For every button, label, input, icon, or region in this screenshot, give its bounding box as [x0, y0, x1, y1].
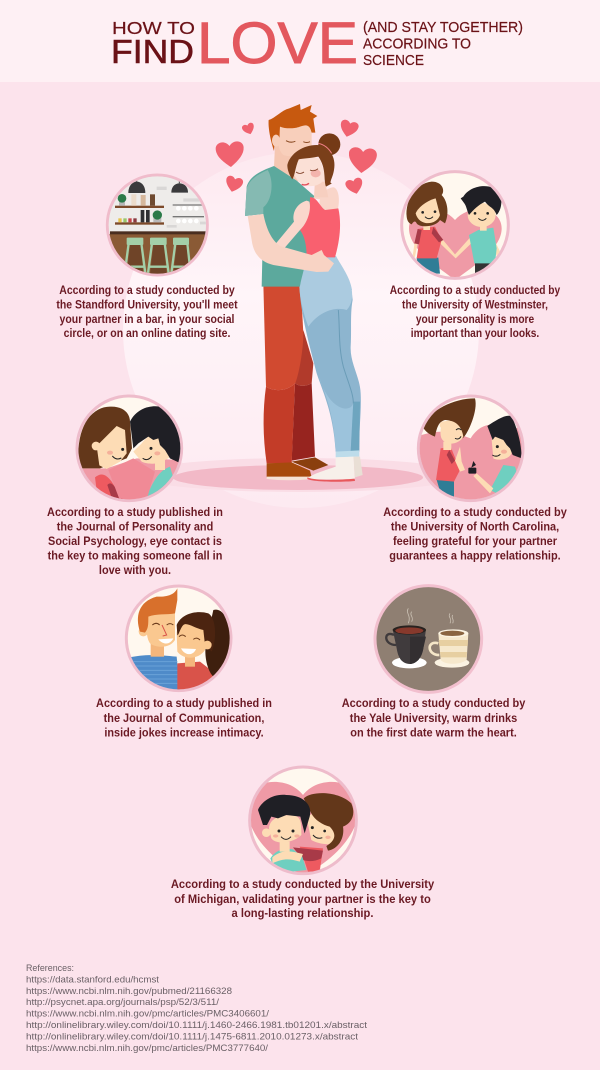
text: Yale study — [342, 698, 526, 740]
header band — [0, 0, 600, 82]
text: eye contact study: the key to making someone fall in — [48, 550, 222, 563]
text: inside jokes study — [96, 698, 272, 740]
text: North Carolina study: feeling grateful for your partner — [393, 536, 558, 548]
references: https://www.ncbi.nlm.nih.gov/pubmed/21166328 — [26, 986, 232, 997]
text: eye contact study: love with you. — [99, 565, 171, 577]
text: North Carolina study: the University of North Carolina, — [391, 521, 559, 534]
man torso and head — [245, 104, 317, 287]
text: Westminster study: According to a study conducted by — [390, 284, 561, 297]
references: http://onlinelibrary.wiley.com/doi/10.1111/j.1475-6811.2010.01273.x/abstract — [26, 1032, 358, 1042]
illustration: hugging couple upper body — [245, 104, 352, 290]
text: North Carolina study — [383, 507, 567, 563]
text: eye contact study: Social Psychology, eye contact is — [48, 536, 222, 548]
circle 5: laughing couple — [126, 586, 231, 693]
text: Stanford study: According to a study conducted by — [59, 284, 235, 297]
text: inside jokes study: According to a study published in — [96, 698, 272, 710]
text: Yale study: on the first date warm the heart. — [350, 727, 517, 740]
references: https://www.ncbi.nlm.nih.gov/pmc/articles/PMC3406601/ — [26, 1008, 269, 1020]
text: Stanford study — [56, 284, 238, 340]
references: http://onlinelibrary.wiley.com/doi/10.1111/j.1460-2466.1981.tb01201.x/abstract — [26, 1020, 367, 1031]
text: Michigan study: a long-lasting relationship. — [232, 908, 373, 920]
text: Stanford study: the Standford University, you'll meet — [56, 299, 238, 312]
title: (AND STAY TOGETHER) — [363, 19, 523, 36]
illustration: hugging couple legs — [263, 280, 363, 482]
text: Stanford study: your partner in a bar, in your social — [60, 313, 234, 326]
title: FIND — [111, 34, 194, 71]
references: https://www.ncbi.nlm.nih.gov/pmc/articles/PMC3777640/ — [26, 1043, 268, 1054]
text: Michigan study: According to a study conducted by the University — [171, 879, 435, 891]
icons: hearts around couple — [215, 119, 377, 196]
text: eye contact study: According to a study published in — [47, 507, 223, 519]
text: eye contact study — [47, 507, 223, 577]
circle 4: proposal — [417, 396, 523, 503]
text: inside jokes study: inside jokes increase intimacy. — [104, 727, 264, 740]
circle 3: eye contact — [77, 396, 183, 503]
circle 6: warm drinks — [375, 586, 482, 692]
title — [111, 11, 523, 76]
circle 7: embracing couple — [246, 767, 360, 875]
text: Yale study: According to a study conducted by — [342, 698, 526, 710]
text: eye contact study: the Journal of Personality and — [57, 521, 213, 534]
title: ACCORDING TO — [363, 36, 471, 52]
text: Westminster study: the University of Westminster, — [402, 299, 548, 312]
text: Stanford study: circle, or on an online dating site. — [64, 327, 230, 340]
text: North Carolina study: guarantees a happy relationship. — [389, 550, 561, 563]
title: SCIENCE — [363, 52, 424, 69]
background glow circle — [123, 152, 479, 508]
text: Westminster study: important than your looks. — [411, 327, 539, 340]
references: http://psycnet.apa.org/journals/psp/52/3/511/ — [26, 997, 219, 1008]
man's arm around woman — [248, 214, 334, 272]
text: Michigan study — [171, 879, 435, 920]
woman — [276, 133, 352, 290]
text: Westminster study: your personality is more — [416, 313, 534, 326]
floor shadow — [135, 458, 465, 492]
references: References: — [26, 963, 74, 974]
references: https://data.stanford.edu/hcmst — [26, 974, 159, 986]
text: North Carolina study: According to a study conducted by — [383, 507, 567, 519]
text: Yale study: the Yale University, warm drinks — [350, 713, 517, 725]
circle 2: couple holding hands — [402, 172, 508, 280]
text: Michigan study: of Michigan, validating your partner is the key to — [174, 894, 431, 906]
text: Westminster study — [390, 284, 561, 340]
text: inside jokes study: the Journal of Communication, — [104, 713, 264, 725]
title: LOVE — [197, 11, 358, 76]
references — [26, 963, 367, 1054]
circle 1: bar scene — [106, 174, 209, 276]
title: HOW TO — [112, 18, 195, 38]
